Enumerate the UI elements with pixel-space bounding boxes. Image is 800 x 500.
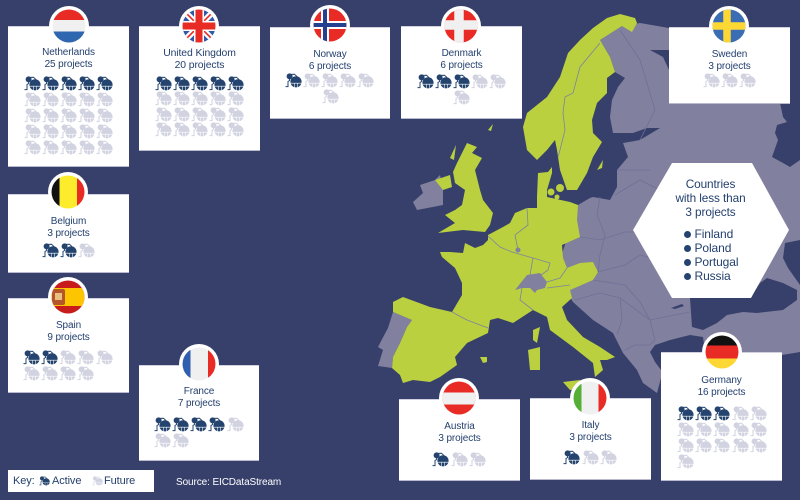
- panel: Germany: [661, 352, 782, 481]
- panel: Netherlands: [8, 26, 129, 167]
- pictogram: 3 projects: [42, 243, 94, 258]
- label: France: France: [184, 386, 214, 397]
- pictogram: 6 projects: [286, 73, 374, 104]
- callout heading: Countries: [686, 177, 735, 191]
- icon: Sweden flag: [709, 6, 749, 42]
- label: France: [178, 386, 220, 409]
- label: Netherlands: 25 projects: [45, 59, 92, 70]
- key icon: future: [92, 476, 103, 486]
- label: Denmark: 6 projects: [440, 60, 483, 71]
- pictogram: 6 projects: [418, 74, 506, 104]
- panel: Denmark: [401, 26, 522, 119]
- bulleted country list: Portugal: [694, 255, 738, 269]
- icon: Spain flag: [48, 277, 88, 314]
- panel: Belgium: [8, 194, 129, 273]
- key: [8, 470, 154, 492]
- panel: France: [139, 365, 259, 461]
- label: Spain: Spain: [56, 320, 81, 331]
- Switzerland and Luxembourg: [515, 248, 547, 293]
- pictogram: 20 projects: [156, 76, 244, 136]
- pictogram: 3 projects: [564, 450, 616, 464]
- label: Austria: [438, 421, 481, 444]
- label: Italy: [569, 420, 612, 443]
- icon: Germany flag: [702, 332, 742, 368]
- hexagon: [633, 163, 789, 298]
- label: Spain: 9 projects: [47, 332, 90, 343]
- participating countries: [392, 14, 637, 390]
- pictogram: 25 projects: [24, 76, 113, 154]
- callout heading: 3 projects: [685, 205, 736, 219]
- panel: United Kingdom: [139, 26, 260, 151]
- label: Netherlands: [42, 47, 95, 70]
- pictogram: 7 projects: [154, 417, 244, 448]
- icon: Austria flag: [439, 378, 479, 414]
- pictogram: 3 projects: [704, 74, 756, 88]
- label: Belgium: Belgium: [51, 216, 86, 227]
- bulleted country list: Finland: [694, 227, 733, 241]
- label: Sweden: Sweden: [712, 49, 747, 60]
- label: Norway: Norway: [313, 49, 347, 60]
- label: Germany: 16 projects: [698, 387, 745, 398]
- icon: Norway flag: [310, 5, 350, 42]
- panel: Sweden: [669, 27, 790, 104]
- label: Austria: Austria: [444, 421, 475, 432]
- icon: Netherlands flag: [49, 6, 89, 42]
- key text: future: Future: [104, 475, 135, 487]
- pictogram: 9 projects: [24, 350, 112, 380]
- country borders: [452, 43, 600, 328]
- source: Source: EICDataStream: [176, 477, 281, 488]
- icon: France flag: [179, 344, 219, 380]
- panel: Norway: [270, 27, 390, 119]
- key text: active: Active: [52, 475, 81, 487]
- label: Germany: [698, 375, 746, 398]
- inland seas: [650, 50, 797, 370]
- icon: Denmark flag: [441, 6, 481, 42]
- icon: UK flag: [179, 6, 219, 42]
- label: United Kingdom: [163, 48, 236, 71]
- callout heading: [675, 177, 746, 219]
- label: Germany: Germany: [701, 375, 742, 386]
- key icon: active: [39, 476, 50, 486]
- callout heading: with less than: [675, 191, 746, 205]
- non-participating land: [378, 23, 800, 393]
- panel: Austria: [399, 399, 520, 481]
- label: Netherlands: Netherlands: [42, 47, 95, 58]
- icon: Belgium flag: [48, 172, 88, 208]
- label: Norway: 6 projects: [309, 61, 351, 72]
- label: France: 7 projects: [178, 398, 220, 409]
- label: Spain: [47, 320, 90, 343]
- pictogram: 3 projects: [432, 452, 486, 466]
- pictogram: 16 projects: [678, 406, 766, 468]
- label: Sweden: [708, 49, 751, 72]
- label: Belgium: [47, 216, 90, 239]
- label: Denmark: Denmark: [442, 48, 481, 59]
- bulleted country list: [684, 227, 738, 283]
- label: Italy: Italy: [582, 420, 599, 431]
- bulleted country list: Russia: [694, 269, 731, 283]
- label: Norway: [309, 49, 351, 72]
- label: Belgium: 3 projects: [47, 228, 90, 239]
- label: Sweden: 3 projects: [708, 61, 751, 72]
- label: United Kingdom: United Kingdom: [163, 48, 236, 59]
- key label: Key:: [13, 475, 35, 487]
- bulleted country list: Poland: [694, 241, 731, 255]
- label: Denmark: [440, 48, 483, 71]
- label: Austria: 3 projects: [438, 433, 481, 444]
- panel: Italy: [530, 398, 651, 480]
- label: United Kingdom: 20 projects: [175, 60, 224, 71]
- callout: countries with less than 3 projects: [633, 163, 789, 298]
- panel: Spain: [8, 298, 129, 393]
- icon: Italy flag: [570, 378, 610, 414]
- label: Italy: 3 projects: [569, 432, 612, 443]
